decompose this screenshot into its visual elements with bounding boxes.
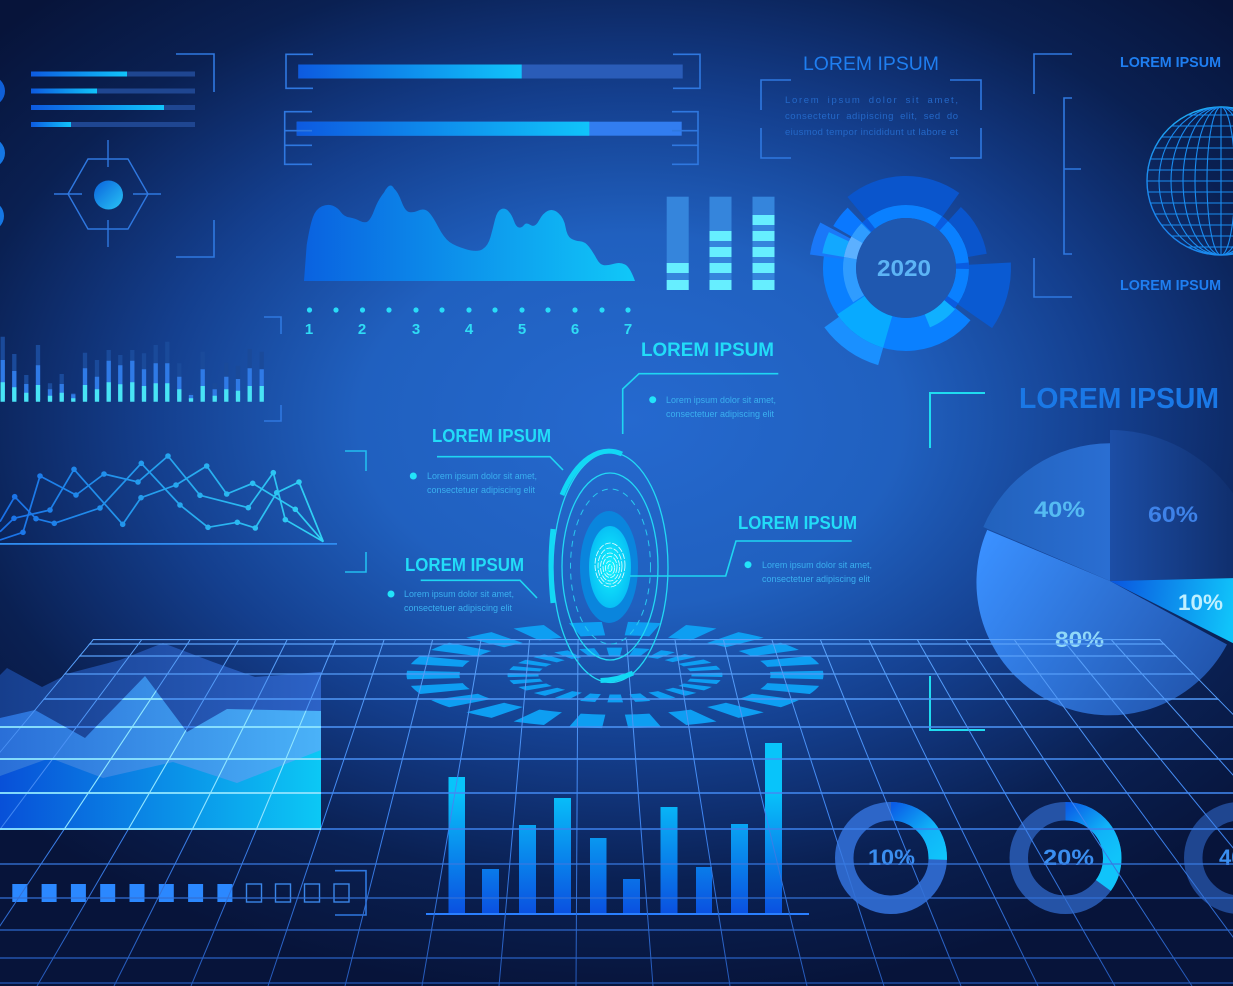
pie labels: 60% xyxy=(1148,502,1198,527)
pie labels: 80% xyxy=(1055,627,1104,652)
text block: paragraph: Lorem ipsum dolor sit amet, xyxy=(785,95,958,106)
axis numbers: 6 xyxy=(571,321,579,338)
bracket: mini bars frame xyxy=(264,317,281,421)
axis numbers: 3 xyxy=(412,321,420,338)
callout: upper left: Lorem ipsum dolor sit amet, xyxy=(427,471,537,481)
callout: upper left: consectetuer adipiscing elit xyxy=(427,485,535,495)
axis numbers: 2 xyxy=(358,321,366,338)
bar chart: stacked columns xyxy=(667,197,774,290)
callout: upper left: LOREM IPSUM xyxy=(432,426,551,446)
callout: lower left: consectetuer adipiscing elit xyxy=(404,603,512,613)
callout: right: LOREM IPSUM xyxy=(738,513,857,533)
icon: fingerprint xyxy=(595,543,625,587)
callout: right: consectetuer adipiscing elit xyxy=(762,574,870,584)
panel: top horizontal bar 1 xyxy=(286,54,700,88)
donut: 20%: 20% xyxy=(1043,845,1094,870)
callout: lower left: Lorem ipsum dolor sit amet, xyxy=(404,589,514,599)
left edge circles xyxy=(0,76,5,231)
text block: paragraph xyxy=(785,95,958,138)
grid highlights over area chart xyxy=(0,690,321,830)
panel: progress bars xyxy=(31,72,195,127)
text block: paragraph: eiusmod tempor incididunt ut labore et xyxy=(785,127,958,138)
donut: 10%: 10% xyxy=(868,845,915,870)
floor rings xyxy=(419,625,811,725)
axis numbers: 1 xyxy=(305,321,313,338)
bracket: pie frame xyxy=(930,393,985,730)
pie labels xyxy=(1034,497,1223,652)
donut: partial 40% xyxy=(1193,811,1233,905)
pie labels: 10% xyxy=(1178,590,1223,615)
label: globe bottom: LOREM IPSUM xyxy=(1120,277,1221,294)
progress squares xyxy=(12,871,366,915)
axis numbers xyxy=(305,321,632,338)
callout: top right: Lorem ipsum dolor sit amet, xyxy=(666,395,776,405)
bar chart: centre bottom xyxy=(426,743,809,915)
callout: upper left xyxy=(410,426,563,495)
callout: right xyxy=(630,513,872,584)
donut: 20% xyxy=(1019,811,1112,905)
callout: top right: consectetuer adipiscing elit xyxy=(666,409,774,419)
area chart: layered mountains xyxy=(0,643,321,830)
callout: lower left xyxy=(388,555,537,613)
axis numbers: 7 xyxy=(624,321,632,338)
label: globe top: LOREM IPSUM xyxy=(1120,54,1221,71)
callout: top right: LOREM IPSUM xyxy=(641,340,774,361)
callout: top right xyxy=(623,340,778,434)
text block: paragraph: consectetur adipiscing elit, sed do xyxy=(785,111,958,122)
panel: top horizontal bar 2 xyxy=(285,112,698,164)
bracket: globe frame xyxy=(1034,54,1081,297)
bracket: paragraph frame xyxy=(761,80,981,158)
axis numbers: 5 xyxy=(518,321,526,338)
pie chart xyxy=(976,430,1233,715)
heading: text panel title: LOREM IPSUM xyxy=(803,54,939,75)
bracket: upper-left frame xyxy=(176,54,214,257)
axis numbers: 4 xyxy=(465,321,474,338)
scanner thick arcs xyxy=(551,451,633,680)
donut chart: 2020: 2020 xyxy=(877,255,931,281)
line chart: network series xyxy=(0,453,337,545)
axis dots xyxy=(307,307,631,313)
bracket: centre-left frame xyxy=(345,451,366,572)
perspective grid xyxy=(0,640,1233,986)
icon: wireframe globe xyxy=(1140,107,1233,255)
donut: 10% xyxy=(844,811,938,905)
fingerprint scanner xyxy=(551,451,668,682)
pie labels: 40% xyxy=(1034,497,1085,522)
icon: hexagon target xyxy=(54,140,161,247)
heading: large title: LOREM IPSUM xyxy=(1019,383,1219,415)
donut chart: 2020 xyxy=(792,154,1020,382)
bar chart: mini stacked bars xyxy=(3,337,262,402)
callout: lower left: LOREM IPSUM xyxy=(405,555,524,575)
area chart: numbered mountain xyxy=(304,186,635,338)
callout: right: Lorem ipsum dolor sit amet, xyxy=(762,560,872,570)
